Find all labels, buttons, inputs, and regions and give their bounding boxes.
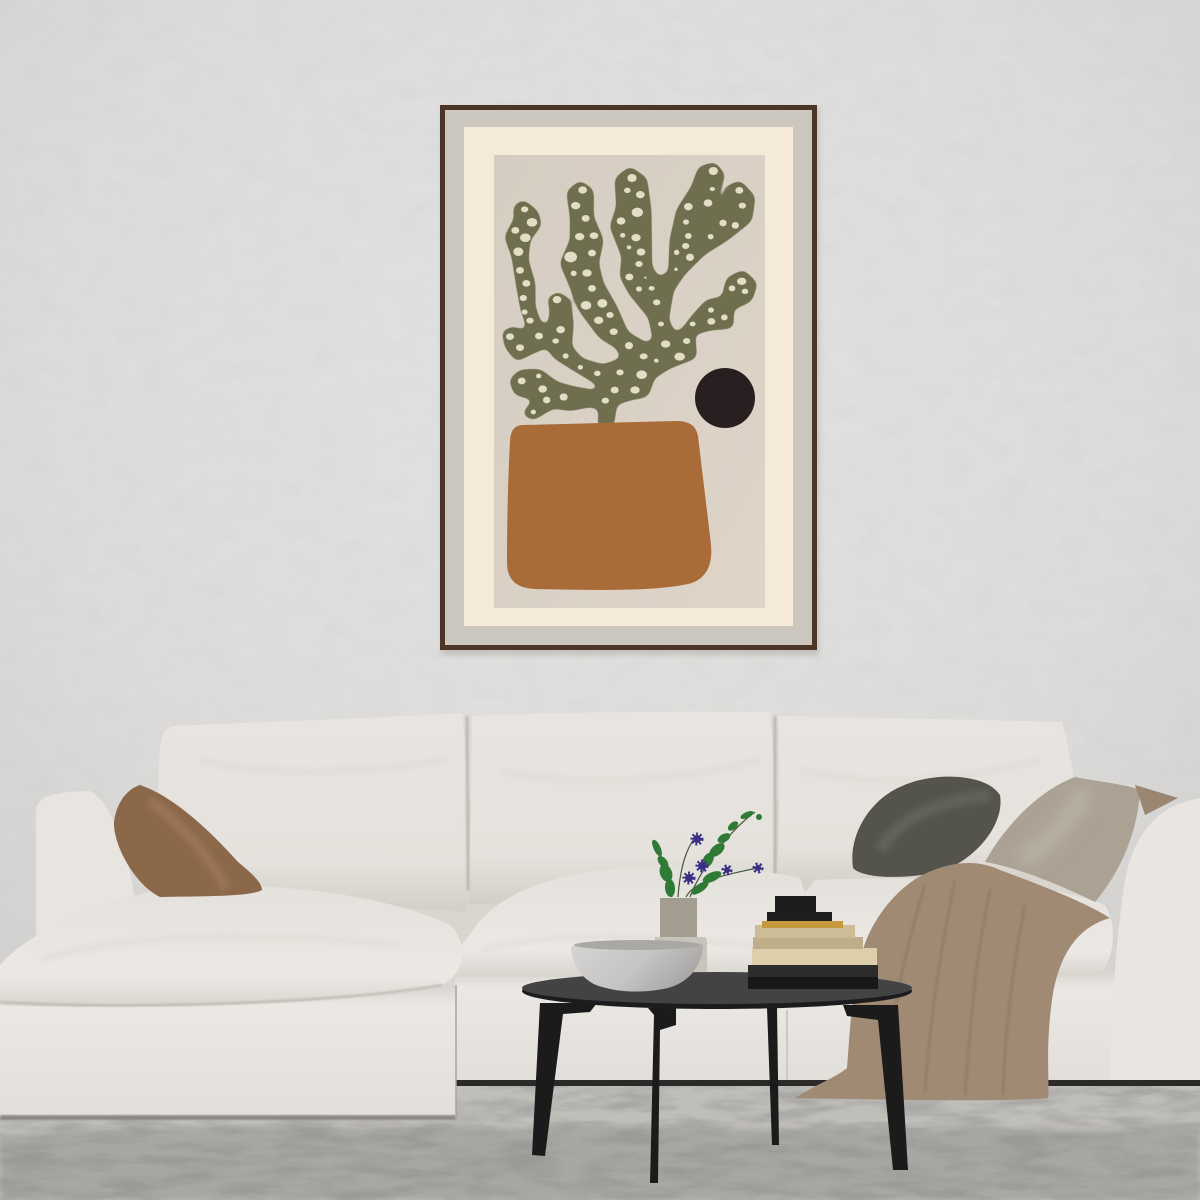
left arm: [36, 791, 135, 935]
shadow under chaise: [0, 1115, 456, 1120]
floor and rug: [0, 1080, 1200, 1200]
coral dots: [506, 167, 748, 414]
stack of books: [748, 896, 878, 989]
black sun circle: [695, 368, 755, 428]
cushion folds: [40, 760, 1040, 960]
right sofa base: [790, 972, 1200, 1080]
pillow: dark green velvet: [852, 777, 1001, 877]
sofa back cushions: [158, 712, 1078, 912]
shadow under sofa: [455, 1080, 1200, 1086]
right arm: [1110, 798, 1200, 1080]
pillow: beige: [985, 777, 1140, 902]
table legs: [532, 1003, 908, 1183]
cream mat: [464, 127, 793, 626]
stems: [656, 812, 757, 897]
sofa inner backing: [155, 800, 1080, 980]
chaise seat cushion: [0, 886, 462, 1007]
pillow: brown: [114, 785, 262, 897]
vase with flowers: [650, 809, 762, 982]
framed print: [440, 105, 819, 655]
throw blanket: [795, 785, 1178, 1100]
yellow book: [762, 921, 843, 928]
base seam: [786, 1010, 788, 1080]
coral plant: [503, 163, 757, 427]
table top: [522, 973, 912, 1009]
serving bowl: [571, 940, 703, 992]
chaise base: [0, 985, 456, 1118]
coffee table: [522, 972, 912, 1183]
centre seat cushion: [456, 867, 809, 977]
centre sofa base: [455, 972, 790, 1080]
sofa: [0, 712, 1200, 1120]
terracotta pot: [507, 421, 711, 590]
black jar: [775, 896, 816, 912]
right seat cushion: [795, 878, 1113, 976]
blue thistle flowers: [685, 835, 761, 882]
art background: [494, 155, 765, 608]
vase body: [660, 898, 697, 938]
chaise and base gap: [455, 985, 457, 1118]
frame: [440, 105, 817, 650]
glass mat: [445, 110, 812, 645]
wall shadow of frame: [442, 108, 819, 655]
cream books: [752, 948, 877, 965]
black book base: [748, 965, 878, 989]
eucalyptus leaves: [650, 809, 762, 897]
small black book: [767, 912, 832, 921]
